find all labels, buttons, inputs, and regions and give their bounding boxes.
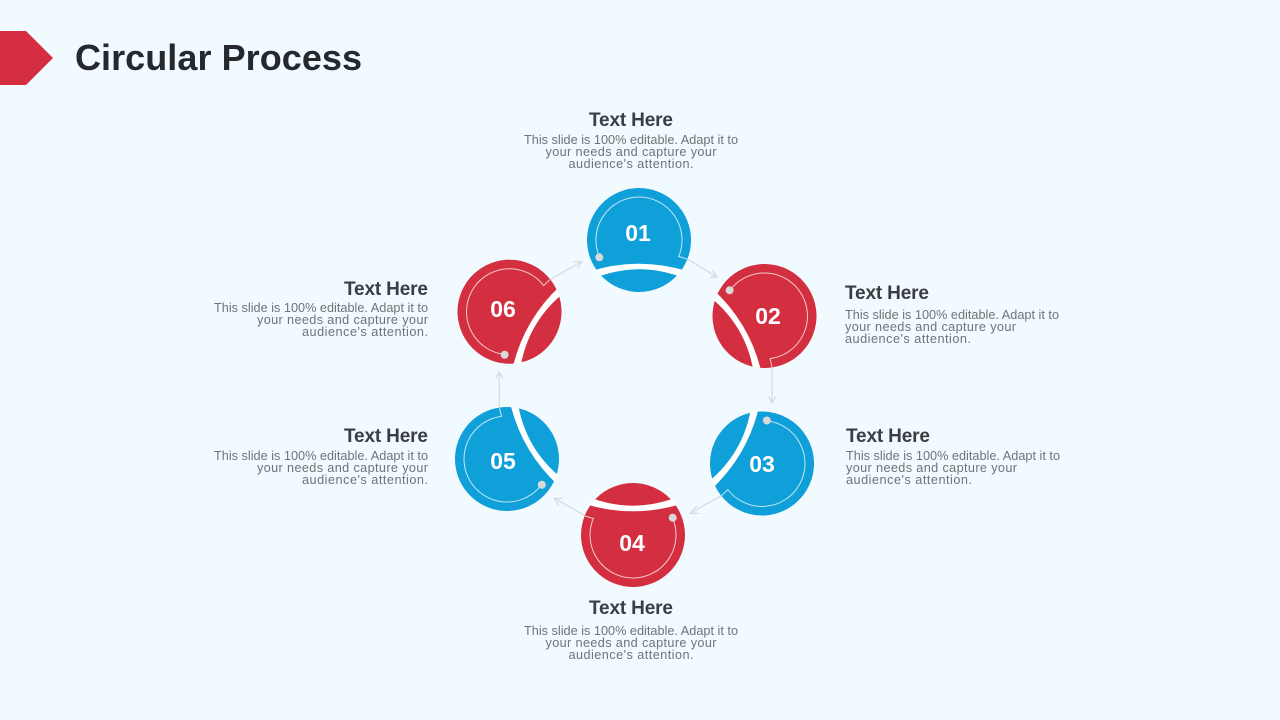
- circle 06: [458, 260, 562, 364]
- text block 05: your needs and capture your: [257, 461, 429, 475]
- text block 04: your needs and capture your: [546, 636, 717, 650]
- text block 03: [846, 426, 1060, 487]
- text block 04: This slide is 100% editable. Adapt it to: [524, 624, 738, 638]
- text block 06: [214, 279, 429, 339]
- number 06: 06: [490, 296, 516, 322]
- text block 04: audience's attention.: [568, 648, 694, 662]
- text block 03: Text Here: [846, 426, 930, 447]
- text block 05: Text Here: [344, 426, 428, 447]
- title: Circular Process: [75, 37, 362, 78]
- arrow: 04 to 05: [554, 498, 584, 515]
- number 01: 01: [625, 220, 651, 246]
- text block 02: This slide is 100% editable. Adapt it to: [845, 308, 1059, 322]
- text block 01: your needs and capture your: [546, 145, 717, 159]
- text block 03: This slide is 100% editable. Adapt it to: [846, 449, 1060, 463]
- circle 04: [581, 483, 685, 587]
- arrow: 06 to 01: [551, 262, 582, 279]
- circle 02: [712, 264, 816, 368]
- number 04: 04: [619, 530, 645, 556]
- number 02: 02: [755, 303, 781, 329]
- circle 05: [455, 407, 559, 511]
- arrow: 01 to 02: [688, 259, 717, 277]
- arrow: 03 to 04: [690, 495, 723, 514]
- circle 01: [587, 188, 691, 292]
- text block 05: This slide is 100% editable. Adapt it to: [214, 449, 428, 463]
- arrow: 02 to 03: [769, 367, 776, 403]
- text block 06: Text Here: [344, 279, 428, 300]
- number 05: 05: [490, 448, 516, 474]
- text block 01: This slide is 100% editable. Adapt it to: [524, 133, 738, 147]
- text block 04: [524, 598, 738, 662]
- text block 04: Text Here: [589, 598, 673, 619]
- text block 06: This slide is 100% editable. Adapt it to: [214, 301, 428, 315]
- text block 02: audience's attention.: [845, 332, 971, 346]
- text block 02: Text Here: [845, 283, 929, 304]
- text block 05: [214, 426, 429, 487]
- text block 01: Text Here: [589, 110, 673, 131]
- text block 03: your needs and capture your: [846, 461, 1018, 475]
- text block 01: audience's attention.: [568, 157, 694, 171]
- text block 02: [845, 283, 1059, 346]
- text block 02: your needs and capture your: [845, 320, 1017, 334]
- text block 06: audience's attention.: [302, 325, 428, 339]
- circle 03: [710, 412, 814, 516]
- arrow: 05 to 06: [496, 372, 503, 407]
- text block 01: [524, 110, 738, 171]
- number 03: 03: [749, 451, 775, 477]
- text block 06: your needs and capture your: [257, 313, 429, 327]
- text block 03: audience's attention.: [846, 473, 972, 487]
- title marker: [0, 31, 53, 85]
- text block 05: audience's attention.: [302, 473, 428, 487]
